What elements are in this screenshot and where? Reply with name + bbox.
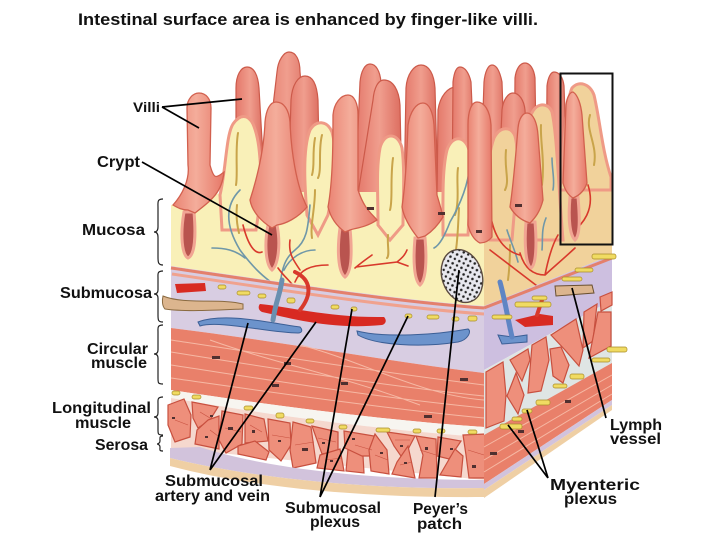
right face circular muscle [484,363,612,498]
crypts [182,197,579,285]
labels: plexus [564,491,617,508]
labels: Crypt [97,154,140,171]
labels: vessel [610,431,661,448]
front villi [173,92,587,243]
labels: Submucosal [165,473,263,490]
longitudinal muscle background [171,398,484,480]
labels: Longitudinal [52,400,151,417]
labels: muscle [75,415,131,432]
labels: artery and vein [155,488,270,505]
circular muscle [171,328,484,427]
yellow nerve plexus spots [172,254,627,434]
back villi [236,52,568,200]
labels: Mucosa [82,222,145,239]
labels: Submucosal [285,500,381,517]
labels: Peyer’s [413,501,468,518]
white band [171,390,484,437]
connective tissue cores [220,84,611,240]
labels: Lymph [610,417,662,434]
blood and lymph vessels [162,272,594,345]
labels: patch [417,516,462,533]
leader lines [142,99,606,497]
tissue block illustration [162,52,627,498]
labels: Submucosa [60,285,152,302]
mucosa border band [171,268,484,308]
labels: Circular [87,341,148,358]
labels: Villi [133,99,160,115]
right face submucosa [484,255,612,370]
highlight box around one villus [560,74,612,244]
serosa [170,447,484,488]
ochre and blue streaks in cores [212,115,595,292]
longitudinal muscle cells front [168,399,485,478]
labels [52,99,662,533]
tan outer edge [170,458,484,497]
right face tan mucosa [484,170,612,306]
labels: plexus [310,514,360,531]
Peyer's patch [435,244,489,308]
layer braces [154,199,163,451]
labels: Myenteric [550,477,640,494]
right face longitudinal muscle [484,292,612,437]
title: Intestinal surface area is enhanced by finger-like villi. [78,11,538,29]
labels: Serosa [95,437,148,454]
submucosa purple layer [171,266,484,373]
labels: muscle [91,355,147,372]
front face yellow mucosa [171,192,484,306]
